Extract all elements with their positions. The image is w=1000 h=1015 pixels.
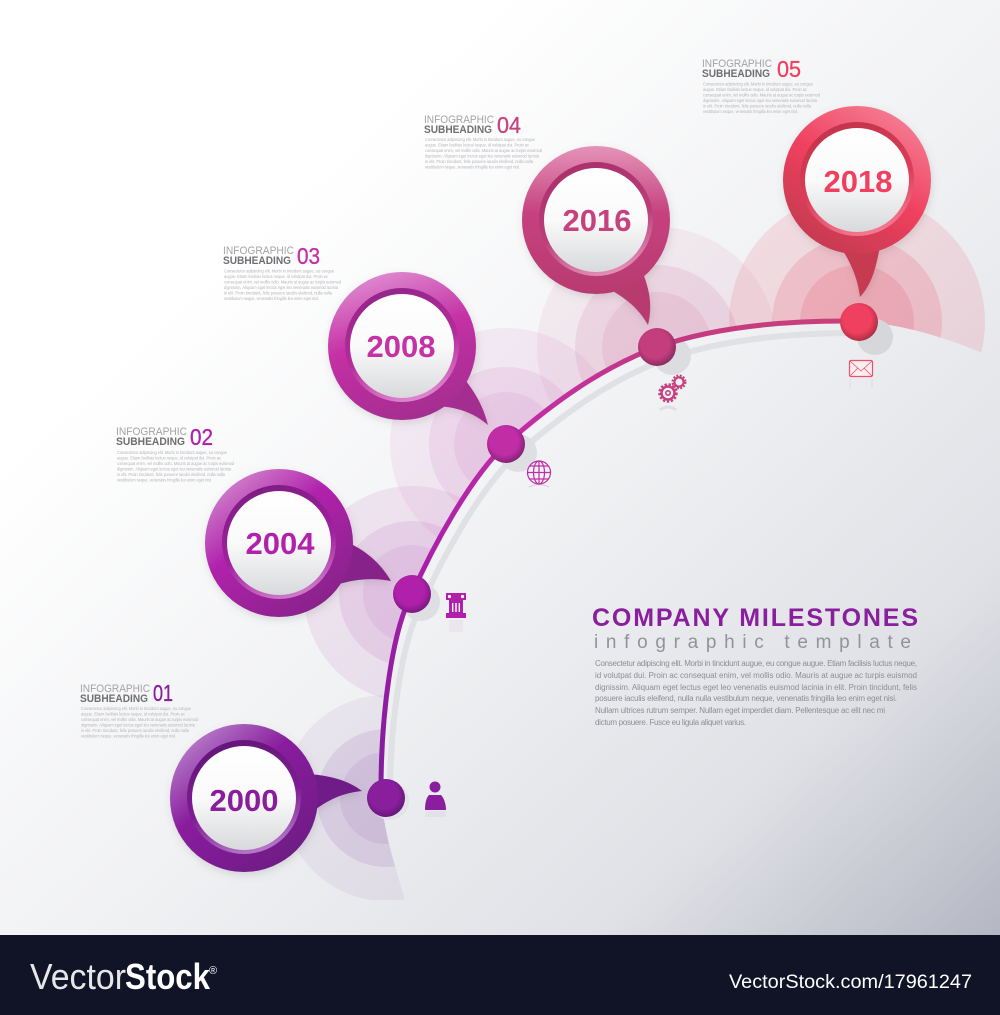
text block 02: 02 [190,424,213,450]
rings: milestone 3 [390,328,597,537]
timeline curve [381,321,845,790]
year label: 2008 [367,329,435,364]
text block 04: 04 [497,112,521,138]
concentric ripple rings [283,194,985,901]
text block 02: in elit. Proin tincidunt, felis posuere iaculis eleifend, nulla nulla [117,472,225,477]
icon: gears [660,376,685,410]
pin 2004 [205,469,391,617]
rings: milestone 2 [306,486,460,698]
text block 03: dignissim. Aliquam eget lectus eget leo venenatis euismod lacinia [224,285,338,290]
body paragraph: posuere iaculis eleifend, nulla nulla vestibulum neque, venenatis fringilla leo enim eget nisi. [595,694,897,703]
rings: milestone 4 [537,228,774,404]
text block 04 [424,112,542,170]
year label: 2018 [824,164,892,199]
text block 03: augue. Etiam facilisis luctus neque, id volutpat dui. Proin ac [224,274,329,279]
footer bar [0,935,1000,1015]
rings: milestone 1 [297,695,404,900]
footer image id: VectorStock.com/17961247 [729,972,972,993]
text block 03: INFOGRAPHIC [223,245,294,257]
text block 02: Consectetur adipiscing elit. Morbi in tincidunt augue, eu congue [117,450,227,455]
body paragraph [595,659,917,727]
year label: 2000 [210,783,278,818]
body paragraph: dignissim. Aliquam eget lectus eget leo venenatis euismod lacinia in elit. Proin tincidunt, felis [595,683,917,692]
body paragraph: dictum posuere. Fusce eu ligula aliquet varius. [595,718,746,727]
text block 01: Consectetur adipiscing elit. Morbi in tincidunt augue, eu congue [81,706,191,711]
text block 01: SUBHEADING [80,693,148,705]
text block 04: vestibulum neque, venenatis fringilla leo enim eget nisl. [425,164,520,170]
text block 02 [116,424,234,482]
text block 02: SUBHEADING [116,436,185,448]
text block 04: Consectetur adipiscing elit. Morbi in tincidunt augue, eu congue [425,137,535,142]
node 2 [393,575,431,613]
text block 03: 03 [297,243,320,269]
icon: person [425,782,446,817]
pin 2016 [522,146,670,325]
pin 2008 [328,272,488,425]
text block 04: consequat enim, vel mollis odio. Mauris at augue ac turpis euismod [425,148,542,153]
text block 04: SUBHEADING [424,124,492,136]
icon: globe [528,461,550,487]
node 4 [638,328,676,366]
rings: milestone 5 [729,213,985,352]
pin 2000 [170,724,362,872]
text block 05: in elit. Proin tincidunt, felis posuere iaculis eleifend, nulla nulla [703,104,811,108]
year label: 2004 [246,526,315,561]
year label: 2016 [563,203,631,238]
text block 04: dignissim. Aliquam eget lectus eget leo venenatis euismod lacinia [425,154,539,158]
pin 2018 [783,106,931,297]
text block 04: augue. Etiam facilisis luctus neque, id volutpat dui. Proin ac [425,142,530,148]
text block 03 [223,243,341,301]
text block 01: augue. Etiam facilisis luctus neque, id volutpat dui. Proin ac [81,712,186,716]
text block 04: in elit. Proin tincidunt, felis posuere iaculis eleifend, nulla nulla [425,159,533,164]
timeline shadow [371,319,893,820]
text block 05: 05 [777,56,801,82]
text block 01: vestibulum neque, venenatis fringilla leo enim eget nisl. [81,734,176,738]
body paragraph: Consectetur adipiscing elit. Morbi in tincidunt augue, eu congue augue. Etiam facilisis luctus neque, [595,659,917,668]
text block 01: in elit. Proin tincidunt, felis posuere iaculis eleifend, nulla nulla [81,728,189,733]
text block 05: INFOGRAPHIC [702,58,772,70]
node 5 [840,303,878,341]
text block 02: consequat enim, vel mollis odio. Mauris at augue ac turpis euismod [117,461,234,466]
text block 04: INFOGRAPHIC [424,114,494,126]
text block 02: INFOGRAPHIC [116,426,187,438]
text block 05: consequat enim, vel mollis odio. Mauris at augue ac turpis euismod [703,92,820,98]
text block 03: vestibulum neque, venenatis fringilla leo enim eget nisl. [224,296,319,301]
text block 01: 01 [153,680,173,706]
text block 01 [80,680,198,738]
text block 02: dignissim. Aliquam eget lectus eget leo venenatis euismod lacinia [117,466,231,472]
body paragraph: Nullam ultrices rutrum semper. Nullam eget imperdiet diam. Pellentesque ac elit nec mi [595,706,885,715]
text block 05: vestibulum neque, venenatis fringilla leo enim eget nisl. [703,109,798,114]
text block 01: dignissim. Aliquam eget lectus eget leo venenatis euismod lacinia [81,722,195,728]
text block 05: augue. Etiam facilisis luctus neque, id volutpat dui. Proin ac [703,87,808,92]
text block 05 [702,56,820,114]
text block 02: augue. Etiam facilisis luctus neque, id volutpat dui. Proin ac [117,456,222,460]
body paragraph: id volutpat dui. Proin ac consequat enim, vel mollis odio. Mauris at augue ac turpis euismod [595,671,917,680]
text block 03: SUBHEADING [223,255,291,267]
subtitle: infographic template [594,632,911,653]
footer logo: Stock [125,956,211,997]
title: COMPANY MILESTONES [592,604,918,632]
text block 02: vestibulum neque, venenatis fringilla leo enim eget nisl. [117,478,212,482]
text block 03: Consectetur adipiscing elit. Morbi in tincidunt augue, eu congue [224,268,334,274]
footer logo: Vector [30,956,126,997]
text block 05: SUBHEADING [702,68,770,80]
icon: pillar [446,593,466,632]
text block 03: consequat enim, vel mollis odio. Mauris at augue ac turpis euismod [224,280,341,284]
node 3 [487,425,525,463]
text block 05: Consectetur adipiscing elit. Morbi in tincidunt augue, eu congue [703,82,813,86]
node 1 [367,779,405,817]
icon: envelope [850,360,872,388]
text block 05: dignissim. Aliquam eget lectus eget leo venenatis euismod lacinia [703,98,817,103]
text block 03: in elit. Proin tincidunt, felis posuere iaculis eleifend, nulla nulla [224,290,332,296]
text block 01: INFOGRAPHIC [80,683,150,695]
footer logo [30,956,217,997]
text block 01: consequat enim, vel mollis odio. Mauris at augue ac turpis euismod [81,717,198,722]
footer logo: ® [209,965,217,977]
